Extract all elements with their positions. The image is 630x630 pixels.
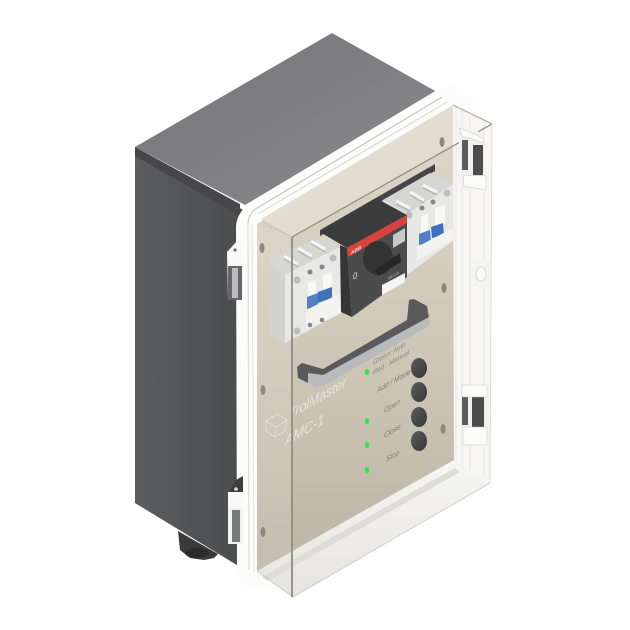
door latch knob xyxy=(473,260,490,287)
transparent door side xyxy=(453,105,492,483)
brand logo: TrolMaster xyxy=(289,372,347,422)
left plate strip highlight xyxy=(257,224,292,571)
lower block xyxy=(417,228,453,260)
upper shelf xyxy=(261,105,453,237)
button labels: Add / Mode xyxy=(376,367,410,395)
lower right hinge xyxy=(462,385,487,445)
sliders xyxy=(421,213,428,233)
zero mark: 0 xyxy=(353,270,357,282)
back plate xyxy=(257,112,454,571)
top-side edge xyxy=(135,147,240,216)
brand logo xyxy=(266,372,347,437)
door frame xyxy=(236,86,490,597)
knob xyxy=(363,241,393,275)
enclosure body xyxy=(135,33,437,570)
status LEDs xyxy=(365,369,369,473)
din rail xyxy=(320,164,435,236)
button labels: Open xyxy=(384,397,400,415)
red band xyxy=(347,215,407,257)
status legend text: Green: Auto xyxy=(373,341,406,367)
model mark: MD116 xyxy=(388,269,400,281)
door bottom lip xyxy=(257,460,490,597)
buttons xyxy=(411,358,427,451)
lower left latch xyxy=(228,476,243,544)
upper left latch xyxy=(227,236,243,300)
door edge xyxy=(291,237,293,597)
model name: AMC-1 xyxy=(284,411,324,450)
sliders xyxy=(308,280,316,297)
button labels: Close xyxy=(384,421,401,440)
left contactor xyxy=(270,236,341,343)
side face xyxy=(135,150,245,570)
right contactor xyxy=(383,173,453,275)
handle xyxy=(297,299,429,388)
ABB label: ABB xyxy=(351,245,361,257)
cable gland xyxy=(178,531,218,560)
button labels: Stop xyxy=(386,447,399,464)
info label xyxy=(393,228,405,248)
rotary switch xyxy=(320,198,407,317)
top face xyxy=(135,33,437,205)
button labels xyxy=(376,367,410,464)
lower block xyxy=(306,293,341,330)
status legend text: Red : Manual xyxy=(373,349,410,377)
screws xyxy=(260,137,446,537)
white tag xyxy=(382,273,405,295)
upper right hinge xyxy=(458,125,486,190)
